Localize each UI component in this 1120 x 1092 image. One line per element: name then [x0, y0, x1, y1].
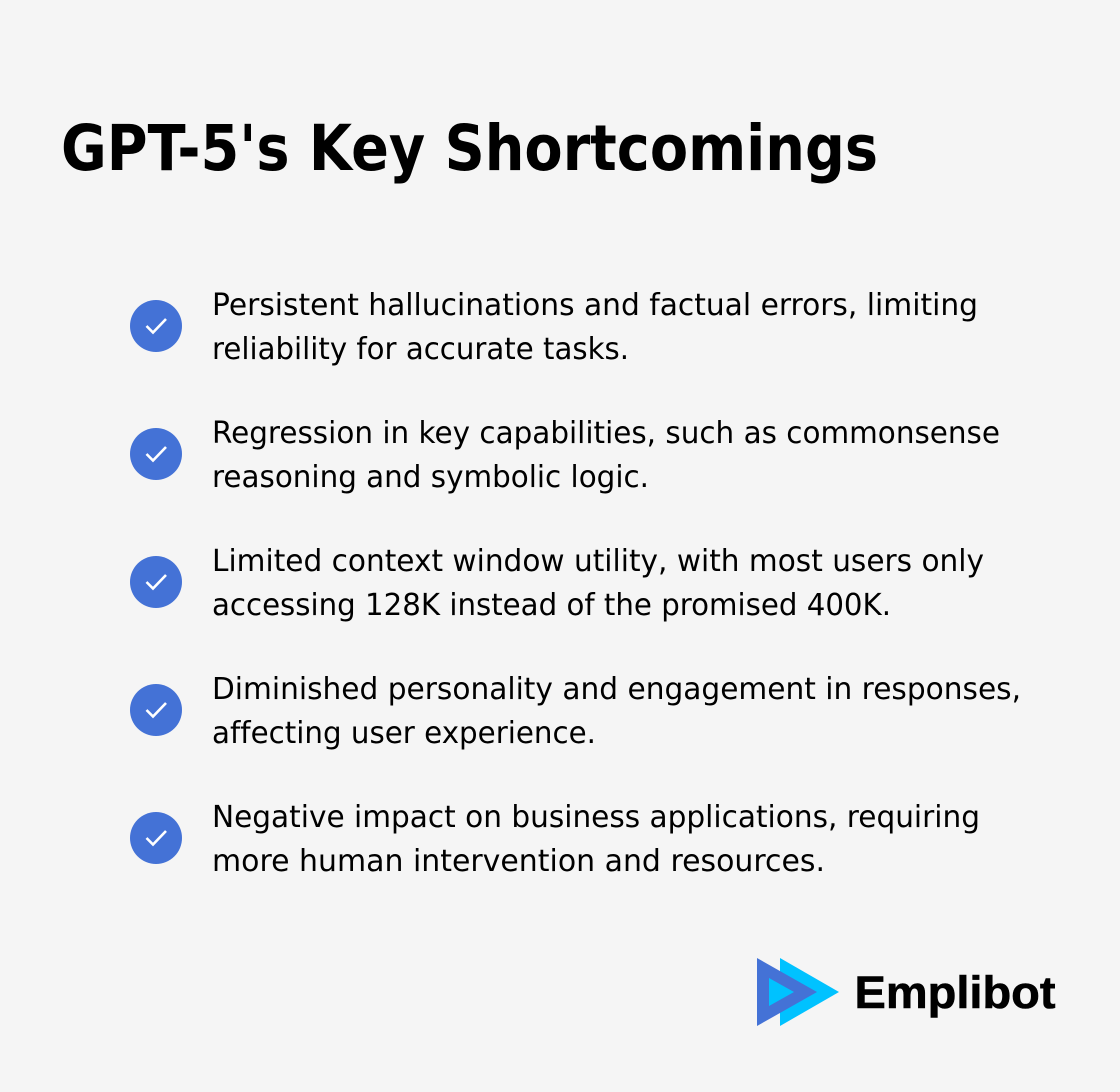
text: item 3: accessing 128K instead of the promised 400K.: [212, 588, 891, 623]
text: item 3: [212, 544, 984, 623]
icon: logo triangles: [757, 958, 839, 1026]
text: item 5: more human intervention and resources.: [212, 844, 825, 879]
text: item 2: reasoning and symbolic logic.: [212, 460, 649, 495]
text: item 3: Limited context window utility, with most users only: [212, 544, 984, 579]
text: item 4: Diminished personality and engagement in responses,: [212, 672, 1021, 707]
text: item 5: [212, 800, 980, 879]
icon: check badge 3: [130, 556, 182, 608]
icon: check badge 5: [130, 812, 182, 864]
text: item 5: Negative impact on business applications, requiring: [212, 800, 980, 835]
text: item 1: Persistent hallucinations and factual errors, limiting: [212, 288, 978, 323]
icon: check badge 1: [130, 300, 182, 352]
icon: check badge 4: [130, 684, 182, 736]
item 4: personality: [130, 672, 1021, 751]
text: item 1: reliability for accurate tasks.: [212, 332, 629, 367]
item 2: regression: [130, 416, 1000, 495]
item 1: hallucinations: [130, 288, 978, 367]
text: item 4: [212, 672, 1021, 751]
title: GPT-5's Key Shortcomings: [61, 112, 878, 185]
logo: Emplibot: [757, 958, 1056, 1026]
text: item 4: affecting user experience.: [212, 716, 596, 751]
text: item 1: [212, 288, 978, 367]
checklist: [130, 288, 1021, 879]
item 5: business impact: [130, 800, 980, 879]
item 3: context window: [130, 544, 984, 623]
logo wordmark: Emplibot: [854, 967, 1056, 1018]
text: item 2: Regression in key capabilities, such as commonsense: [212, 416, 1000, 451]
text: item 2: [212, 416, 1000, 495]
icon: check badge 2: [130, 428, 182, 480]
